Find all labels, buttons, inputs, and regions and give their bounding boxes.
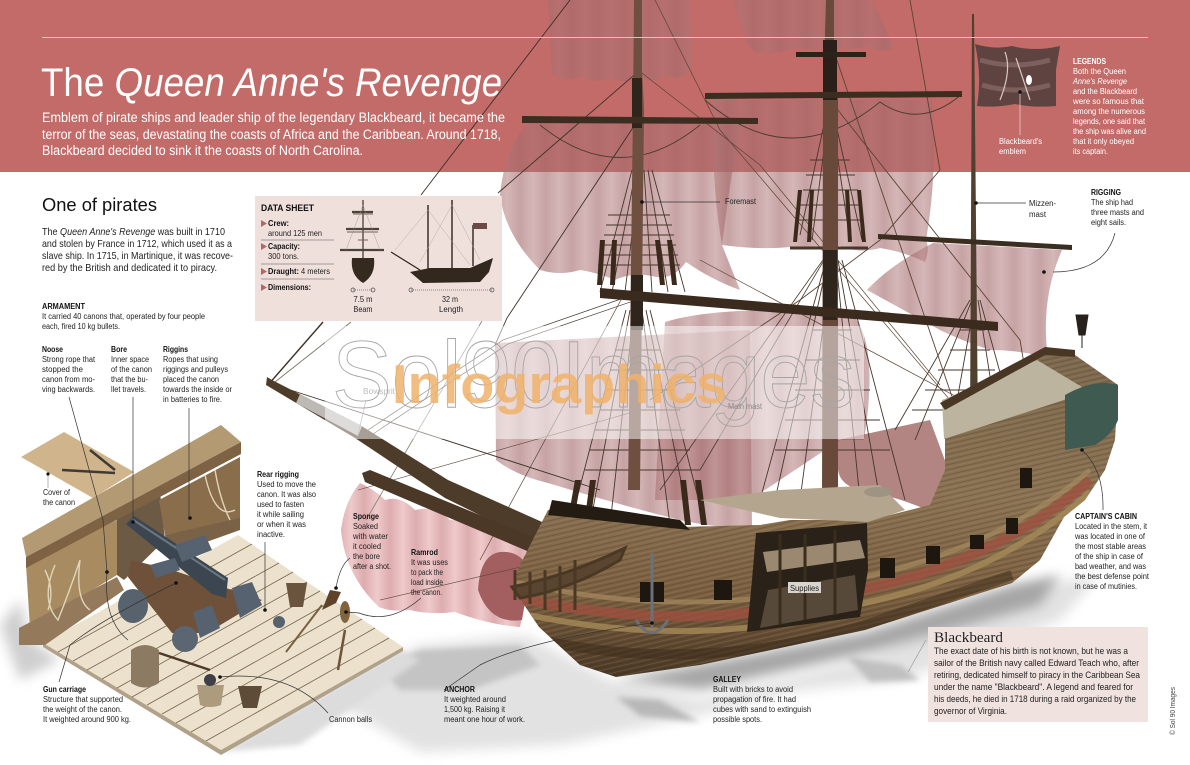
intro text: Emblem of pirate ships and leader ship of the legendary Blackbeard, it became the bbox=[42, 110, 505, 125]
label: cannon balls: Cannon balls bbox=[329, 715, 372, 724]
label: ramrod: the canon. bbox=[411, 588, 442, 597]
sail: lower fore bbox=[495, 330, 752, 530]
label: sponge: with water bbox=[352, 532, 388, 541]
sail: fore topsail bbox=[548, 0, 692, 81]
flag: Blackbeard's emblem bbox=[975, 44, 1060, 107]
label: rigging: three masts and bbox=[1091, 208, 1144, 217]
label: riggins: in batteries to fire. bbox=[163, 395, 222, 404]
panel: data sheet: Crew: bbox=[268, 218, 289, 228]
label: legends: the ship was alive and bbox=[1073, 127, 1146, 136]
intro paragraph: red by the British and dedicated it to piracy. bbox=[42, 263, 217, 274]
label: main mast: Main mast bbox=[728, 402, 763, 411]
label: Blackbeard's emblem: Blackbeard's bbox=[999, 137, 1042, 146]
wall gap bbox=[117, 492, 165, 580]
cannon illustration bbox=[19, 425, 403, 755]
panel: Blackbeard: Blackbeard bbox=[934, 630, 1004, 646]
lantern bbox=[1076, 315, 1088, 348]
trunnions and blocks bbox=[150, 535, 262, 638]
heading: One of pirates: One of pirates bbox=[42, 194, 157, 215]
bow gallery rail bbox=[512, 548, 625, 612]
label: captain's cabin bbox=[1074, 512, 1150, 591]
forecastle rail dark bbox=[548, 500, 690, 530]
cross beam at main mast top bbox=[796, 52, 866, 57]
deck floor bbox=[43, 535, 403, 750]
copyright: © Sol 90 Images bbox=[1169, 687, 1177, 735]
label: riggins: placed the canon bbox=[163, 375, 219, 384]
lower fore yard bbox=[600, 288, 998, 331]
text: armament bbox=[42, 302, 206, 331]
label: galley: cubes with sand to extinguish bbox=[713, 705, 811, 714]
label: sponge: Sponge bbox=[353, 512, 379, 521]
label: rear rigging: Used to move the bbox=[257, 480, 317, 489]
label: noose: Noose bbox=[42, 345, 63, 354]
label: mizzenmast: mast bbox=[1029, 210, 1047, 219]
sail: fore course bbox=[500, 122, 740, 290]
label: anchor: ANCHOR bbox=[444, 685, 475, 694]
label: rear rigging bbox=[257, 470, 317, 539]
forward deck bbox=[700, 485, 905, 522]
panel: Blackbeard: sailor of the British navy called Edward Teach who, after bbox=[934, 658, 1139, 668]
panel: Blackbeard: governor of Virginia. bbox=[934, 706, 1007, 716]
wall plinth bbox=[19, 577, 124, 645]
label: rear rigging: it while sailing bbox=[257, 510, 304, 519]
label: mizzenmast bbox=[1029, 199, 1056, 219]
label: ramrod: It was uses bbox=[411, 558, 448, 567]
panel: data sheet: Draught: 4 meters bbox=[268, 266, 330, 276]
wall left block bbox=[26, 520, 117, 628]
label: legends: Both the Queen bbox=[1073, 67, 1126, 76]
label: captain's cabin: bad weather, and was bbox=[1075, 562, 1146, 571]
panel: data sheet: DATA SHEET bbox=[261, 203, 314, 214]
label: galley: propagation of fire. It had bbox=[713, 695, 796, 704]
label: legends: its captain. bbox=[1073, 147, 1108, 156]
text: armament: ARMAMENT bbox=[42, 302, 85, 311]
sail: lower main aft bbox=[838, 420, 967, 520]
dimension: length: 32 m bbox=[442, 294, 458, 304]
label: legends: were so famous that bbox=[1072, 97, 1145, 106]
label: riggins bbox=[163, 345, 232, 404]
label: captain's cabin: of the ship in case of bbox=[1075, 552, 1144, 561]
label: noose bbox=[42, 345, 96, 394]
callout leader lines bbox=[48, 92, 1115, 713]
shroud deadeyes bbox=[567, 190, 866, 525]
stern gallery green bbox=[1065, 383, 1118, 450]
bucket bbox=[238, 686, 262, 708]
label: galley: Built with bricks to avoid bbox=[713, 685, 793, 694]
sails bbox=[495, 0, 1062, 530]
icon: ship side view bbox=[391, 200, 493, 283]
label: bore: that the bu- bbox=[111, 375, 148, 384]
ground shadows bbox=[0, 575, 1100, 752]
panel: Blackbeard: under the name "Blackbeard". A legend and feared for bbox=[934, 682, 1133, 692]
intro text: Blackbeard decided to sink it the coasts of North Carolina. bbox=[42, 143, 363, 158]
foremast bbox=[628, 0, 644, 490]
sponge bbox=[286, 605, 322, 652]
ropes bbox=[45, 470, 235, 620]
wheels bbox=[118, 589, 148, 623]
label: cover of the canon: Cover of bbox=[43, 488, 71, 497]
label: rear rigging: canon. It was also bbox=[257, 490, 316, 499]
shrouds and ratlines bbox=[570, 120, 1020, 525]
sail: main course bbox=[712, 100, 934, 262]
sail: main topsail bbox=[734, 0, 894, 53]
label: noose: ving backwards. bbox=[42, 385, 95, 394]
intro text bbox=[42, 110, 505, 158]
label: bore bbox=[111, 345, 152, 394]
masts bbox=[522, 0, 1072, 500]
label: legends: that it only obeyed bbox=[1073, 137, 1134, 146]
label: captain's cabin: the best defense point bbox=[1075, 572, 1150, 581]
text: armament: It carried 40 canons that, operated by four people bbox=[42, 312, 206, 321]
label: rear rigging: inactive. bbox=[257, 530, 285, 539]
label: rear rigging: Rear rigging bbox=[257, 470, 299, 479]
bulwark beam bbox=[22, 425, 241, 557]
panel: data sheet: 300 tons. bbox=[268, 251, 299, 261]
panel: data sheet: Dimensions: bbox=[268, 282, 311, 292]
label: riggins: Ropes that using bbox=[163, 355, 218, 364]
gun ports bbox=[640, 468, 1032, 602]
label: captain's cabin: in case of mutinies. bbox=[1075, 582, 1137, 591]
label: supplies: Supplies bbox=[790, 584, 819, 593]
panel: Blackbeard: The exact date of his birth is not known, but he was a bbox=[934, 646, 1129, 656]
intro text: terror of the seas, devastating the coasts of Africa and the Caribbean. Around 1718, bbox=[42, 127, 501, 142]
bowsprit bbox=[266, 377, 570, 565]
anchor bbox=[636, 553, 668, 632]
label: captain's cabin: the most stable areas bbox=[1075, 542, 1146, 551]
plinth right bbox=[165, 518, 240, 555]
label: Blackbeard's emblem bbox=[999, 137, 1042, 156]
deck planks bbox=[58, 544, 389, 741]
label: legends: among the numerous bbox=[1073, 107, 1145, 116]
label: rigging bbox=[1091, 188, 1144, 227]
dimension: length: Length bbox=[439, 304, 463, 314]
label: bore: Inner space bbox=[111, 355, 149, 364]
label: gun carriage: the weight of the canon. bbox=[43, 705, 122, 714]
label: noose: canon from mo- bbox=[42, 375, 95, 384]
capstan bbox=[864, 487, 892, 497]
mainmast bbox=[822, 0, 838, 500]
sail: mizzen bbox=[867, 243, 1062, 358]
label: legends: Anne's Revenge bbox=[1072, 77, 1127, 86]
label: rear rigging: used to fasten bbox=[257, 500, 304, 509]
watermark: Infographics bbox=[392, 353, 727, 415]
label: riggins: towards the inside or bbox=[163, 385, 232, 394]
label: rigging: eight sails. bbox=[1091, 218, 1126, 227]
label: riggins: Riggins bbox=[163, 345, 188, 354]
label: legends: and the Blackbeard bbox=[1073, 87, 1137, 96]
header rule bbox=[42, 36, 1148, 38]
label: foremast: Foremast bbox=[725, 197, 757, 206]
label: captain's cabin: was located in one of bbox=[1074, 532, 1146, 541]
label: rigging: RIGGING bbox=[1091, 188, 1121, 197]
carriage bbox=[128, 560, 262, 633]
intro paragraph bbox=[42, 227, 233, 274]
dimension: beam: Beam bbox=[354, 304, 372, 314]
icon: ship front view bbox=[340, 200, 384, 283]
label: noose: Strong rope that bbox=[42, 355, 96, 364]
panel: data sheet bbox=[255, 196, 502, 321]
label: sponge: after a shot. bbox=[353, 562, 391, 571]
panel: data sheet: around 125 men bbox=[268, 228, 322, 238]
label: riggins: riggings and pulleys bbox=[163, 365, 228, 374]
intro paragraph: slave ship. In 1715, in Martinique, it was recove- bbox=[42, 251, 233, 262]
label: gun carriage: Structure that supported bbox=[43, 695, 123, 704]
barrel bbox=[126, 516, 228, 598]
label: bowsprit: Bowsprit bbox=[363, 387, 396, 396]
ball pot bbox=[197, 685, 224, 707]
handspike bbox=[159, 653, 210, 670]
label: ramrod: to pack the bbox=[411, 568, 443, 577]
label: ramrod: Ramrod bbox=[411, 548, 438, 557]
intro paragraph: and stolen by France in 1712, which used it as a bbox=[42, 239, 232, 250]
label: anchor: meant one hour of work. bbox=[444, 715, 525, 724]
panel: Blackbeard: his deeds, he died in 1718 during a raid organized by the bbox=[934, 694, 1136, 704]
header band bbox=[0, 0, 1190, 172]
upper yards bbox=[522, 116, 758, 124]
label: legends bbox=[1072, 57, 1146, 156]
callout dots bbox=[46, 90, 1084, 679]
label: mizzenmast: Mizzen- bbox=[1029, 199, 1056, 208]
label: captain's cabin: CAPTAIN'S CABIN bbox=[1075, 512, 1137, 521]
barrel keg bbox=[131, 645, 159, 688]
bucket 2 bbox=[286, 583, 307, 607]
label: anchor: It weighted around bbox=[444, 695, 506, 704]
aft rail bbox=[940, 347, 1075, 410]
cutaway interior bbox=[747, 523, 868, 632]
label: captain's cabin: Located in the stem, it bbox=[1075, 522, 1148, 531]
label: gun carriage bbox=[43, 685, 131, 724]
label: sponge: Soaked bbox=[353, 522, 378, 531]
label: sponge: it cooled bbox=[353, 542, 381, 551]
panel: data sheet: Capacity: bbox=[268, 241, 300, 251]
label: Blackbeard's emblem: emblem bbox=[999, 147, 1026, 156]
wall right block bbox=[159, 457, 240, 535]
label: ramrod bbox=[411, 548, 448, 597]
label: cover of the canon: the canon bbox=[43, 498, 75, 507]
label: gun carriage: Gun carriage bbox=[43, 685, 86, 694]
label: sponge bbox=[352, 512, 391, 571]
dimension: beam bbox=[351, 288, 375, 314]
sail: bow flare bbox=[478, 552, 530, 621]
label: galley: possible spots. bbox=[713, 715, 762, 724]
label: bore: Bore bbox=[111, 345, 127, 354]
label: gun carriage: It weighted around 900 kg. bbox=[43, 715, 131, 724]
text: armament: each, fired 10 kg bullets. bbox=[42, 322, 120, 331]
sail: spritsail bbox=[341, 483, 540, 627]
cover plank bbox=[21, 432, 134, 498]
panel: Blackbeard bbox=[928, 627, 1148, 722]
ramrod bbox=[338, 630, 345, 670]
label: legends: legends, one said that bbox=[1073, 117, 1146, 126]
label: rigging: The ship had bbox=[1091, 198, 1133, 207]
sail: main lower bbox=[655, 310, 870, 500]
hull bbox=[505, 315, 1118, 677]
mizzen yard bbox=[878, 234, 1072, 250]
label: anchor: 1,500 kg. Raising it bbox=[444, 705, 506, 714]
label: legends: LEGENDS bbox=[1073, 57, 1107, 66]
label: cover of the canon bbox=[43, 488, 75, 507]
dimension: beam: 7.5 m bbox=[354, 294, 372, 304]
label: sponge: the bore bbox=[353, 552, 381, 561]
label: ramrod: load inside bbox=[411, 578, 443, 587]
panel: Blackbeard: retiring, dedicated himself to piracy in the Caribbean Sea bbox=[934, 670, 1141, 680]
label: bore: of the canon bbox=[111, 365, 152, 374]
title: The Queen Anne's Revenge bbox=[41, 61, 502, 105]
quarterdeck bbox=[942, 360, 1082, 439]
watermark: Sol90Images bbox=[332, 322, 855, 428]
intro paragraph: The Queen Anne's Revenge was built in 1710 bbox=[42, 227, 225, 238]
rigging stays bbox=[268, 0, 1030, 600]
chain bbox=[62, 450, 115, 473]
label: rear rigging: or when it was bbox=[257, 520, 306, 529]
label: galley bbox=[713, 675, 811, 724]
cannonball cluster bbox=[273, 616, 285, 628]
label: bore: llet travels. bbox=[111, 385, 146, 394]
label: anchor bbox=[444, 685, 525, 724]
mizzenmast bbox=[970, 14, 978, 430]
dimension: length bbox=[409, 288, 494, 314]
label: galley: GALLEY bbox=[713, 675, 742, 684]
label: noose: stopped the bbox=[42, 365, 84, 374]
